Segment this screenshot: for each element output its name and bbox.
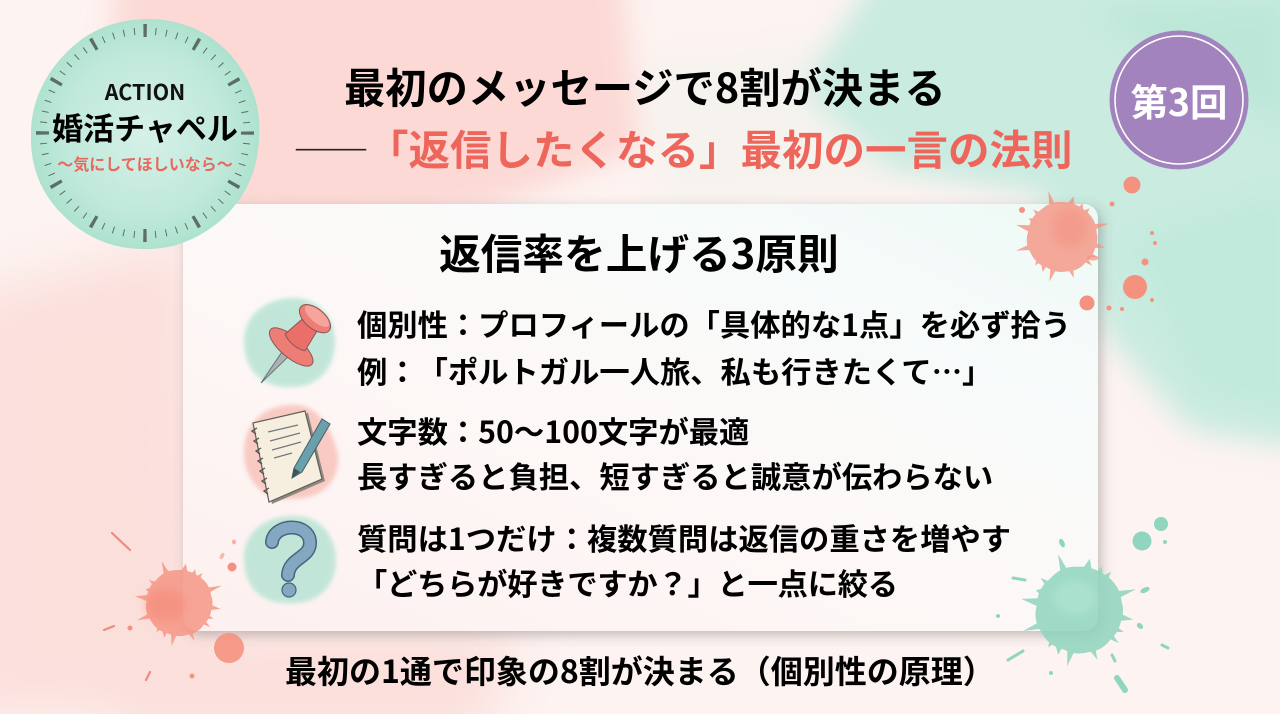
- principle 2 text: 文字数：50～100文字が最適: [357, 408, 749, 452]
- logo: clock disc: [31, 19, 259, 249]
- card heading: 返信率を上げる3原則: [439, 222, 839, 282]
- logo subtitle: ～気にしてほしいなら～: [57, 151, 233, 175]
- splatter: bottom left coral: [104, 533, 244, 680]
- icon: notebook and pen on coral blob: [244, 405, 338, 504]
- logo label: ACTION: ACTION: [105, 76, 185, 107]
- principle 3 text: 質問は1つだけ：複数質問は返信の重さを増やす: [357, 515, 1011, 559]
- principle 1 text: 個別性：プロフィールの「具体的な1点」を必ず拾う: [357, 301, 1071, 345]
- icon: pushpin on mint blob: [240, 294, 342, 400]
- principle 3 text: [357, 515, 1011, 604]
- title line 1: 最初のメッセージで8割が決まる: [344, 55, 946, 115]
- principle 2 text: [357, 408, 993, 497]
- footer note: 最初の1通で印象の8割が決まる（個別性の原理）: [285, 647, 995, 693]
- badge: purple circle: [1110, 30, 1248, 170]
- title line 2 with dash: 「返信したくなる」最初の一言の法則: [367, 117, 1073, 177]
- splatter: top right coral: [1005, 176, 1157, 311]
- principle 2 text: 長すぎると負担、短すぎると誠意が伝わらない: [357, 453, 993, 497]
- title line 2 with dash: ――: [293, 120, 371, 175]
- badge text: 第3回: [1130, 72, 1228, 127]
- principle 1 text: [357, 301, 1071, 392]
- icon: question mark on mint blob: [244, 516, 336, 603]
- logo title: 婚活チャペル: [52, 104, 238, 149]
- splatter: bottom right mint: [996, 517, 1168, 690]
- principle 1 text: 例：「ポルトガル一人旅、私も行きたくて…」: [357, 348, 992, 392]
- panel: principles card: [183, 204, 1098, 631]
- principle 3 text: 「どちらが好きですか？」と一点に絞る: [357, 560, 898, 604]
